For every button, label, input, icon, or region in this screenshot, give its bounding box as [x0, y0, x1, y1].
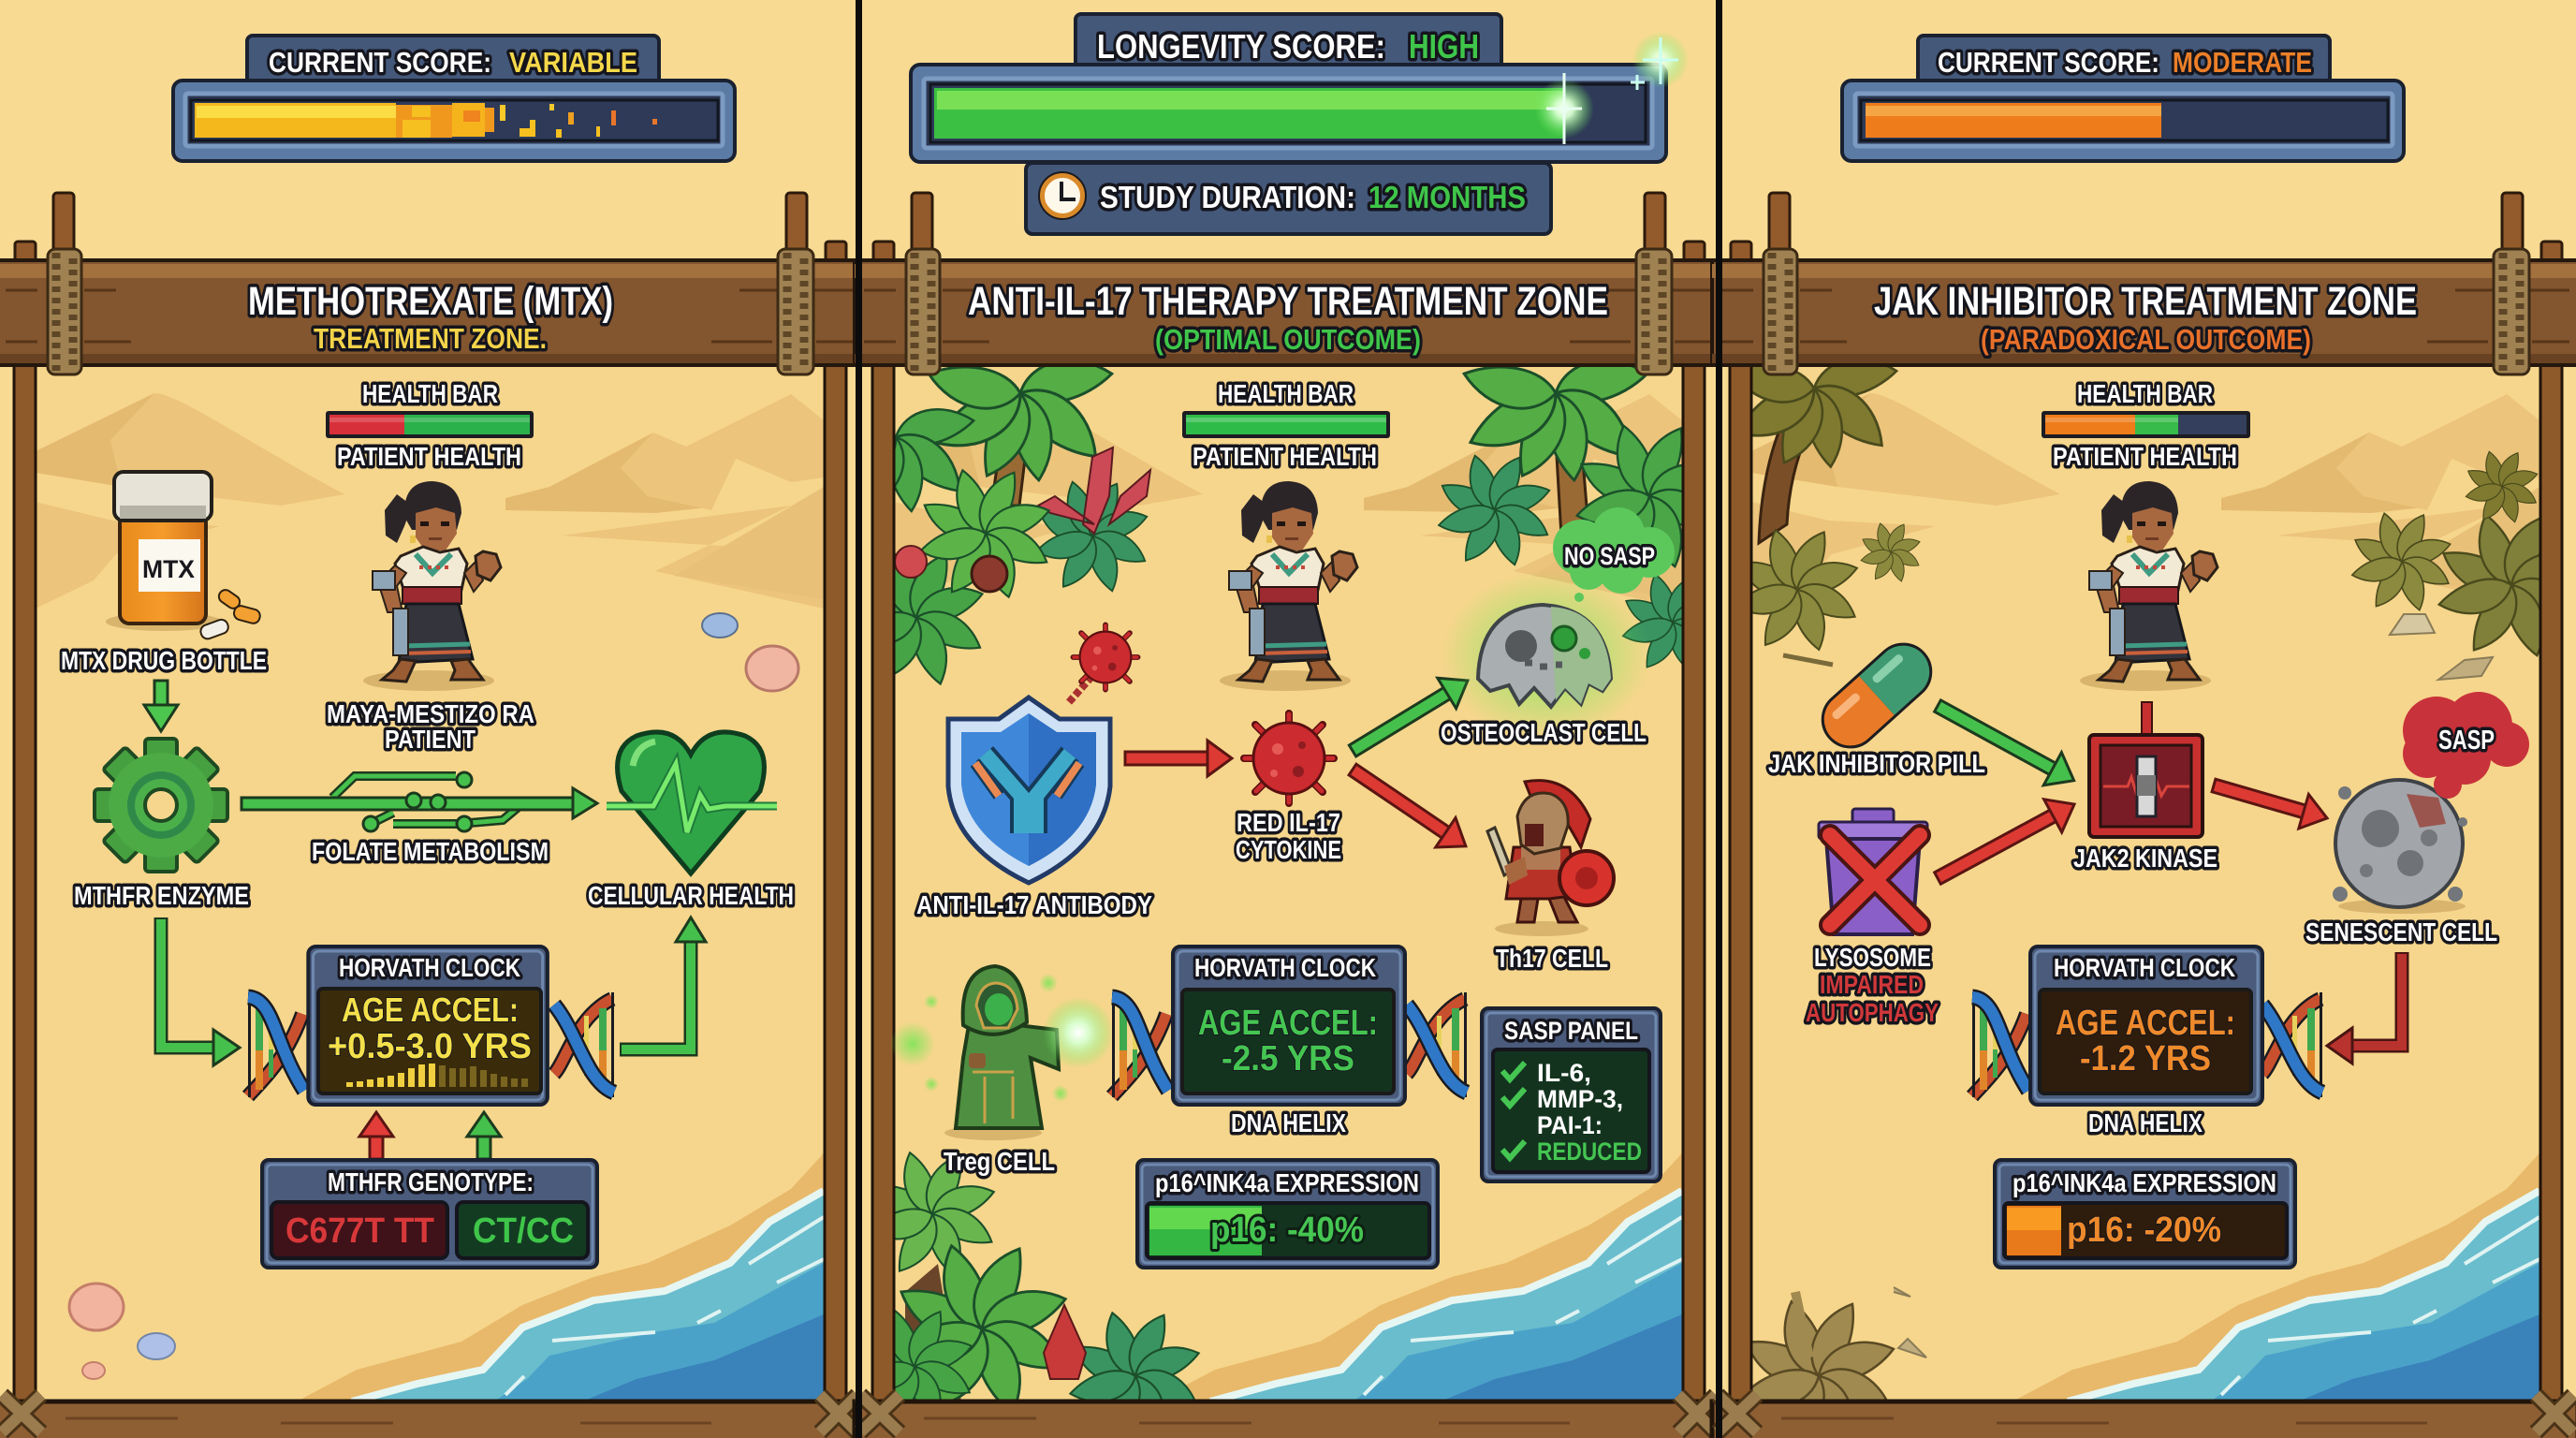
health bar: full: HEALTH BAR [1218, 379, 1354, 408]
icon: senescent cell [2333, 780, 2467, 914]
panel 1 wooden frame [0, 365, 862, 1438]
dna helix right [2262, 992, 2322, 1097]
heading: JAK inhibitor: JAK INHIBITOR TREATMENT ZONE [1874, 279, 2417, 324]
icon: MTX drug bottle: MTX [142, 555, 195, 583]
MTHFR genotype panel: CT/CC [473, 1211, 574, 1251]
icon: MTX drug bottle [106, 472, 261, 640]
arrow: protective genotype up [467, 1112, 501, 1159]
label: anti-IL-17 antibody: ANTI-IL-17 ANTIBODY [916, 890, 1152, 919]
label: MTHFR enzyme: MTHFR ENZYME [74, 881, 249, 910]
longevity score label: HIGH [1409, 27, 1479, 66]
icon: anti-IL-17 antibody shield [948, 697, 1110, 883]
health bar: partial [2042, 379, 2250, 471]
arrow: cytokine to osteoclast [1343, 666, 1477, 766]
panel: anti-IL-17 therapy treatment zone [813, 14, 1725, 1438]
horvath clock panel: AGE ACCEL: [2056, 1004, 2235, 1043]
label: senescent cell: SENESCENT CELL [2305, 917, 2497, 946]
label: red IL-17 cytokine: CYTOKINE [1236, 835, 1341, 864]
patient caption [327, 699, 534, 754]
panel 1 scene: desert and shore [28, 360, 833, 1401]
health bar: partial: HEALTH BAR [2077, 379, 2213, 408]
study duration panel: STUDY DURATION: [1100, 180, 1355, 214]
arrow: enzyme to DNA [161, 917, 240, 1065]
p16 expression panel [1137, 1160, 1438, 1268]
panel 2 wooden sign [855, 193, 1720, 374]
MTHFR genotype panel: MTHFR GENOTYPE: [328, 1167, 534, 1196]
icon: red IL-17 particle on antibody [1069, 624, 1138, 702]
panel 3 scene: dry oasis [1752, 367, 2539, 1399]
label: lysosome impaired autophagy: LYSOSOME [1814, 943, 1931, 972]
panel 1 wooden sign [0, 193, 862, 374]
arrow: pill to kinase [1928, 689, 2083, 797]
p16 expression panel [1995, 1160, 2295, 1268]
label: Treg cell: Treg CELL [944, 1147, 1055, 1176]
callout: no SASP [1553, 507, 1675, 602]
SASP panel: REDUCED [1537, 1137, 1642, 1166]
label: lysosome impaired autophagy: AUTOPHAGY [1806, 998, 1939, 1027]
dna helix right [554, 992, 614, 1097]
heading: anti-IL-17 therapy [968, 279, 1608, 356]
heading: methotrexate: TREATMENT ZONE. [314, 322, 547, 355]
beach shells and pebbles [69, 613, 798, 1379]
horvath clock panel: +0.5-3.0 YRS [328, 1027, 532, 1066]
panel 3 wooden sign [1712, 193, 2576, 374]
label: cellular health: CELLULAR HEALTH [588, 881, 794, 910]
arrow: antibody to cytokine [1125, 741, 1232, 776]
check marks [1502, 1063, 1525, 1158]
icon: JAK2 kinase [2089, 702, 2203, 837]
antibody Y [975, 754, 1079, 833]
SASP panel: MMP-3, [1537, 1085, 1623, 1113]
icon: Th17 warrior cell [1487, 781, 1614, 936]
label: JAK2 kinase: JAK2 KINASE [2073, 844, 2217, 873]
panel 2 scene: tropical beach [895, 367, 1681, 1399]
dna helix right [1407, 992, 1467, 1097]
SASP panel: PAI-1: [1537, 1111, 1603, 1139]
longevity score label: LONGEVITY SCORE: [1097, 27, 1385, 66]
dna helix left [1112, 992, 1168, 1097]
MTHFR genotype panel: C677T TT [285, 1211, 434, 1251]
dna helix left [1972, 992, 2028, 1097]
icon: red IL-17 cytokine [1244, 713, 1334, 803]
heading: anti-IL-17 therapy: ANTI-IL-17 THERAPY TREATMENT ZONE [968, 279, 1608, 324]
MTHFR genotype panel [262, 1160, 597, 1268]
horvath clock panel [308, 946, 548, 1105]
icon: MTHFR enzyme gear [95, 739, 227, 872]
dna helix left [248, 992, 304, 1097]
arrow: lysosome to kinase [1928, 787, 2084, 895]
icon: osteoclast skull cell [1442, 571, 1651, 740]
icon: lysosome crossed out [1819, 809, 1927, 934]
heading: JAK inhibitor [1874, 279, 2417, 356]
label: DNA helix: DNA HELIX [2088, 1108, 2203, 1137]
panel: JAK inhibitor treatment zone [1712, 36, 2576, 1438]
p16 expression panel: p16^INK4a EXPRESSION [1155, 1168, 1419, 1197]
label: Th17 cell: Th17 CELL [1496, 944, 1608, 973]
score label: CURRENT SCORE: [1938, 46, 2159, 79]
arrow: kinase to senescent cell [2209, 769, 2332, 835]
panel: methotrexate treatment zone [0, 36, 862, 1438]
patient caption: MAYA-MESTIZO RA [327, 699, 534, 728]
p16 expression panel: p16: -40% [1210, 1211, 1364, 1250]
SASP panel [1482, 1008, 1661, 1181]
horvath clock panel [2030, 946, 2262, 1105]
health bar: mixed [326, 379, 534, 471]
character: patient [1220, 481, 1357, 691]
label: lysosome impaired autophagy: IMPAIRED [1820, 970, 1924, 999]
label: MTX drug bottle: MTX DRUG BOTTLE [61, 646, 267, 675]
sparkle at bar corner [1631, 32, 1689, 90]
patient caption: PATIENT [385, 725, 476, 754]
horvath clock panel [1173, 946, 1405, 1105]
horvath clock panel: HORVATH CLOCK [339, 953, 520, 982]
arrow: DNA to cellular health [620, 917, 706, 1049]
label: DNA helix: DNA HELIX [1231, 1108, 1346, 1137]
panel divider left [856, 0, 862, 1438]
horvath clock panel: -1.2 YRS [2080, 1039, 2211, 1078]
sparkle at bar tip [1534, 73, 1594, 144]
icon: JAK inhibitor pill [1813, 635, 1940, 756]
label: osteoclast cell: OSTEOCLAST CELL [1441, 718, 1647, 747]
panel 2 wooden frame [855, 365, 1720, 1438]
heading: methotrexate: METHOTREXATE (MTX) [248, 279, 613, 324]
arrow: bottle to enzyme [144, 681, 178, 731]
SASP panel: SASP PANEL [1504, 1017, 1638, 1045]
callout: SASP: SASP [2438, 726, 2495, 756]
score label: CURRENT SCORE: [269, 46, 491, 79]
heading: JAK inhibitor: (PARADOXICAL OUTCOME) [1981, 323, 2311, 356]
panel divider right [1716, 0, 1722, 1438]
arrow: risk genotype up [359, 1112, 393, 1159]
horvath clock panel: -2.5 YRS [1222, 1039, 1354, 1078]
health bar: mixed: PATIENT HEALTH [337, 442, 521, 471]
study duration panel: 12 MONTHS [1368, 180, 1526, 214]
p16 expression panel: p16: -20% [2067, 1211, 2221, 1250]
horvath clock panel: AGE ACCEL: [1198, 1004, 1378, 1043]
palm trees and jungle foliage [813, 351, 1725, 1438]
arrow: senescent cell to DNA [2327, 952, 2402, 1064]
p16 expression panel: p16^INK4a EXPRESSION [2012, 1168, 2276, 1197]
icon: Treg robed cell [890, 966, 1114, 1140]
health bar: mixed: HEALTH BAR [362, 379, 498, 408]
horvath clock panel: AGE ACCEL: [342, 990, 519, 1029]
icon: cellular health heart [607, 732, 777, 873]
label: JAK inhibitor pill: JAK INHIBITOR PILL [1768, 749, 1985, 778]
character: patient [363, 481, 501, 691]
score bar: moderate [1842, 36, 2404, 161]
equalizer bars [346, 1064, 528, 1087]
label: red IL-17 cytokine: RED IL-17 [1237, 808, 1340, 837]
health bar: full: PATIENT HEALTH [1193, 442, 1377, 471]
icon: clock [1039, 172, 1086, 219]
heading: methotrexate [248, 279, 613, 355]
label: folate metabolism: FOLATE METABOLISM [312, 837, 549, 866]
study duration panel [1026, 163, 1551, 234]
SASP panel: IL-6, [1537, 1059, 1591, 1087]
score label: VARIABLE [509, 46, 637, 79]
score bar: variable [173, 36, 735, 161]
callout: SASP [2403, 692, 2529, 799]
heading: anti-IL-17 therapy: (OPTIMAL OUTCOME) [1155, 323, 1421, 356]
horvath clock panel: HORVATH CLOCK [1194, 953, 1376, 982]
label: lysosome impaired autophagy [1806, 943, 1939, 1027]
arrow: cytokine to Th17 [1342, 755, 1476, 861]
score bar: high [911, 14, 1689, 162]
health bar: partial: PATIENT HEALTH [2053, 442, 2237, 471]
panel 3 wooden frame [1712, 365, 2576, 1438]
dry palm and withered plants [1727, 350, 2576, 1438]
label: red IL-17 cytokine [1236, 808, 1341, 864]
horvath clock panel: HORVATH CLOCK [2054, 953, 2235, 982]
arrow: folate metabolism pathway [242, 772, 597, 831]
character: patient [2080, 481, 2217, 691]
callout: no SASP: NO SASP [1564, 542, 1655, 570]
score label: MODERATE [2173, 46, 2312, 79]
health bar: full [1182, 379, 1390, 471]
